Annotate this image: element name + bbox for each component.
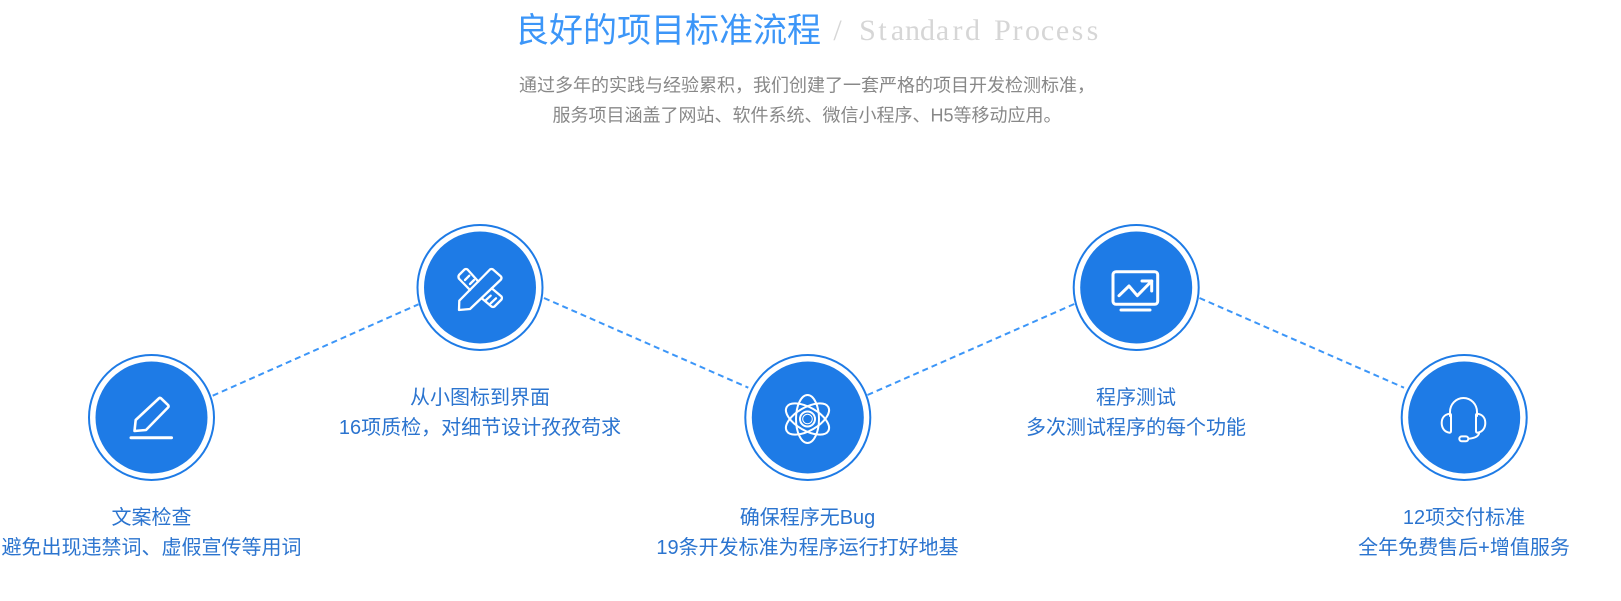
- title: 良好的项目标准流程: [515, 12, 821, 50]
- step 4: program testing: [1026, 225, 1246, 439]
- icon: pencil: [131, 398, 172, 438]
- icon: headset: [1442, 398, 1485, 441]
- connector: step 4 to step 5: [1200, 298, 1404, 388]
- icon: monitor with trend: [1113, 272, 1158, 310]
- icon: pencil and ruler: [458, 269, 502, 310]
- label: 文案检查: [112, 506, 192, 529]
- step 1: copy check: [2, 355, 302, 559]
- label: 16项质检，对细节设计孜孜苟求: [339, 416, 621, 439]
- step 3: program quality: [656, 355, 959, 559]
- label: 从小图标到界面: [410, 386, 550, 409]
- label: 多次测试程序的每个功能: [1026, 416, 1246, 439]
- label: 确保程序无Bug: [740, 506, 875, 529]
- connector: step 2 to step 3: [544, 298, 748, 388]
- intro text: 服务项目涵盖了网站、软件系统、微信小程序、H5等移动应用。: [552, 106, 1062, 126]
- intro text: [519, 76, 1095, 126]
- step 5: delivery: [1358, 355, 1570, 559]
- connector: step 3 to step 4: [868, 304, 1074, 395]
- label: 避免出现违禁词、虚假宣传等用词: [2, 536, 302, 559]
- label: [656, 506, 959, 559]
- intro text: 通过多年的实践与经验累积，我们创建了一套严格的项目开发检测标准，: [519, 76, 1095, 96]
- label: 12项交付标准: [1403, 506, 1525, 529]
- title: / Standard Process: [833, 14, 1098, 47]
- label: 19条开发标准为程序运行打好地基: [656, 536, 959, 559]
- label: 全年免费售后+增值服务: [1358, 536, 1570, 559]
- label: [1026, 386, 1246, 439]
- label: [339, 386, 621, 439]
- label: 程序测试: [1096, 386, 1176, 409]
- icon: atom: [781, 395, 834, 443]
- step 2: interface design: [339, 225, 621, 439]
- title: [515, 12, 1098, 50]
- connector: step 1 to step 2: [213, 304, 418, 396]
- label: [2, 506, 302, 559]
- label: [1358, 506, 1570, 559]
